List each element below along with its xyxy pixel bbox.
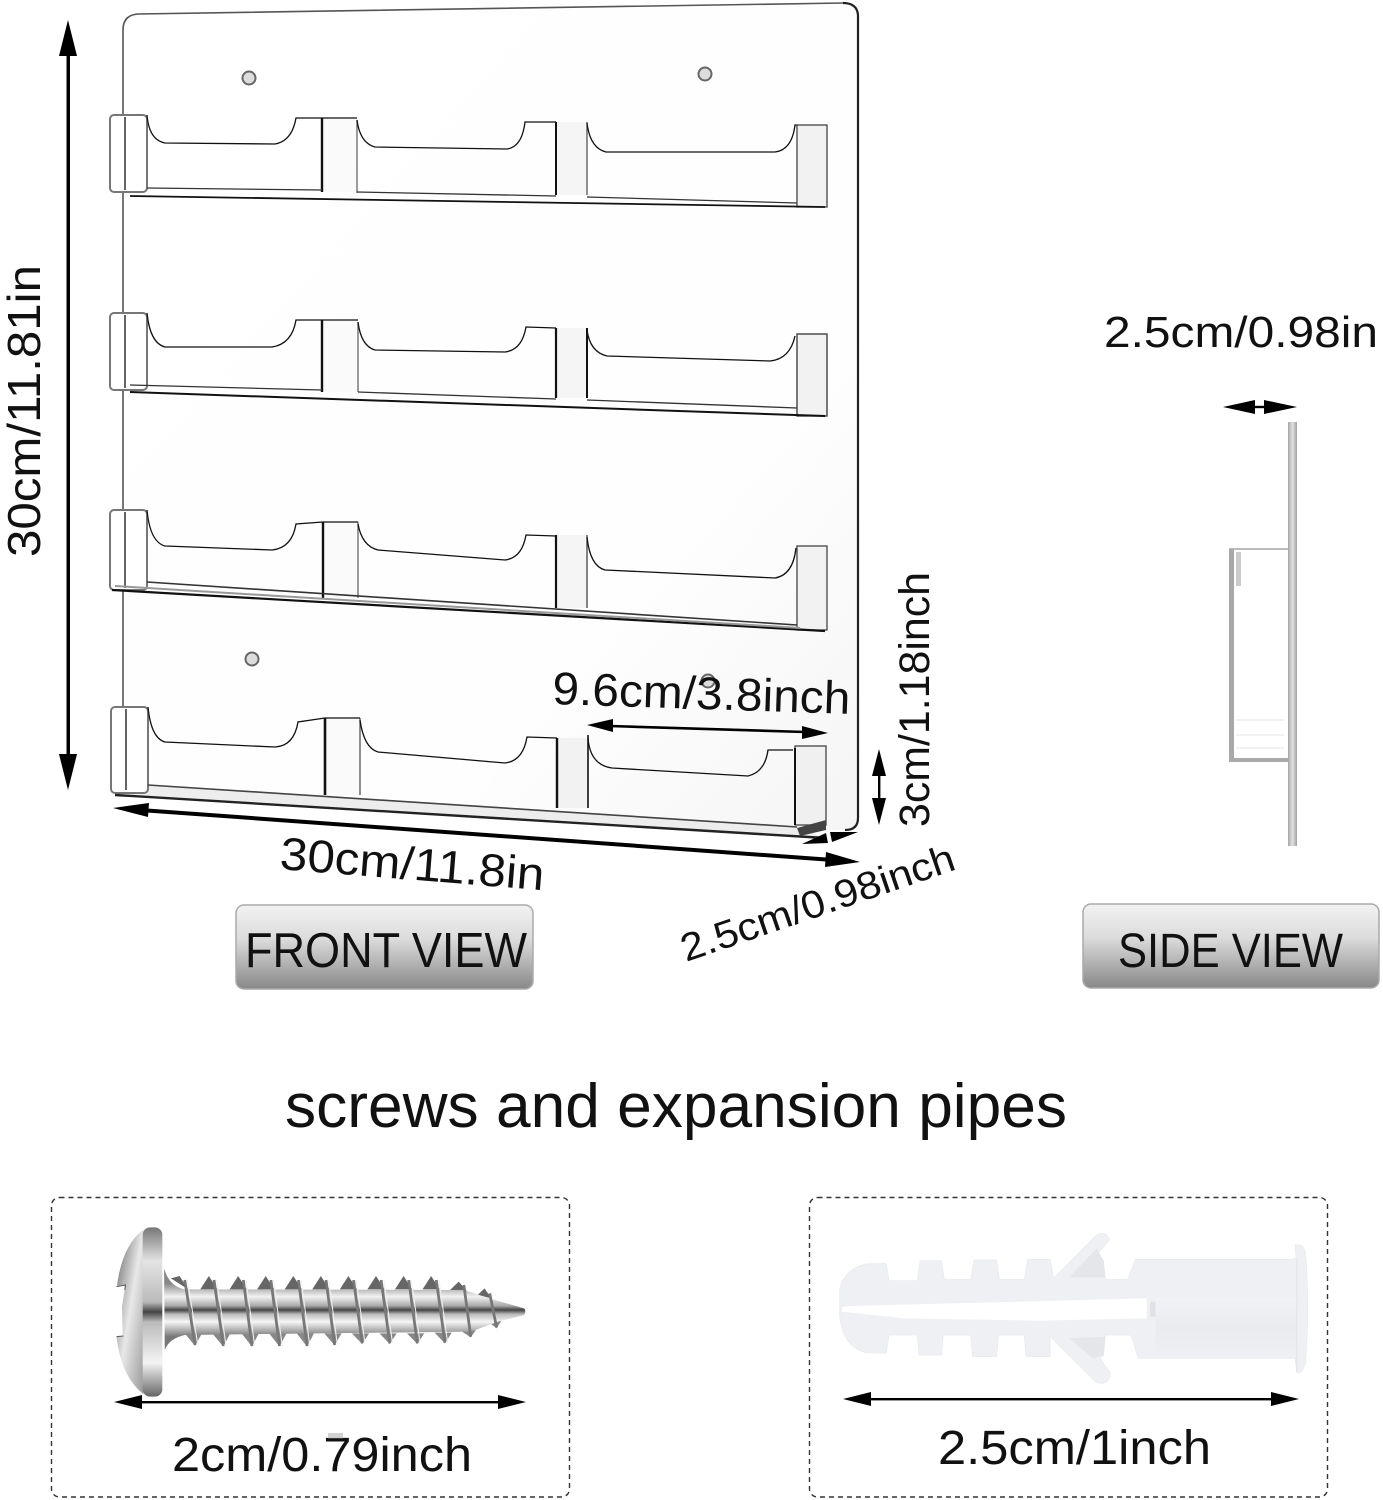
shelf row 2 bbox=[110, 313, 827, 416]
button: front view: FRONT VIEW bbox=[245, 924, 528, 978]
button: side view bbox=[1083, 904, 1379, 988]
arrow: side depth bbox=[1223, 400, 1297, 414]
shelf row 4 bbox=[111, 707, 826, 838]
arrow: pocket width bbox=[587, 719, 828, 739]
icon: expansion pipe bbox=[840, 1233, 1308, 1383]
label: screw length: 2cm/0.79inch bbox=[172, 1429, 472, 1482]
button: front view bbox=[236, 905, 533, 989]
side view illustration bbox=[1229, 422, 1297, 846]
icon: screw bbox=[115, 1227, 525, 1397]
arrow: screw length bbox=[114, 1395, 526, 1409]
arrow: pocket height bbox=[872, 749, 886, 825]
label: side depth: 2.5cm/0.98in bbox=[1104, 308, 1378, 357]
arrow: front width bbox=[113, 803, 860, 867]
arrow: depth bbox=[802, 832, 858, 844]
arrow: pipe length bbox=[843, 1392, 1299, 1406]
mounting holes bbox=[242, 68, 714, 688]
label: pipe length: 2.5cm/1inch bbox=[938, 1422, 1211, 1475]
heading: screws and expansion pipes: screws and expansion pipes bbox=[285, 1072, 1067, 1141]
panel: expansion pipe bbox=[810, 1198, 1328, 1497]
panel: screw bbox=[52, 1198, 570, 1497]
label: pocket height: 3cm/1.18inch bbox=[891, 572, 939, 827]
shelf row 1 bbox=[110, 115, 827, 207]
back plate bbox=[123, 3, 858, 830]
button: side view: SIDE VIEW bbox=[1118, 925, 1344, 978]
shelf row 3 bbox=[110, 510, 827, 631]
label: depth: 2.5cm/0.98inch bbox=[675, 837, 960, 971]
label: width: 30cm/11.8in bbox=[278, 827, 547, 900]
label: pocket width: 9.6cm/3.8inch bbox=[552, 662, 851, 724]
panel: front view acrylic holder bbox=[110, 3, 858, 838]
arrow: front height bbox=[59, 20, 77, 790]
